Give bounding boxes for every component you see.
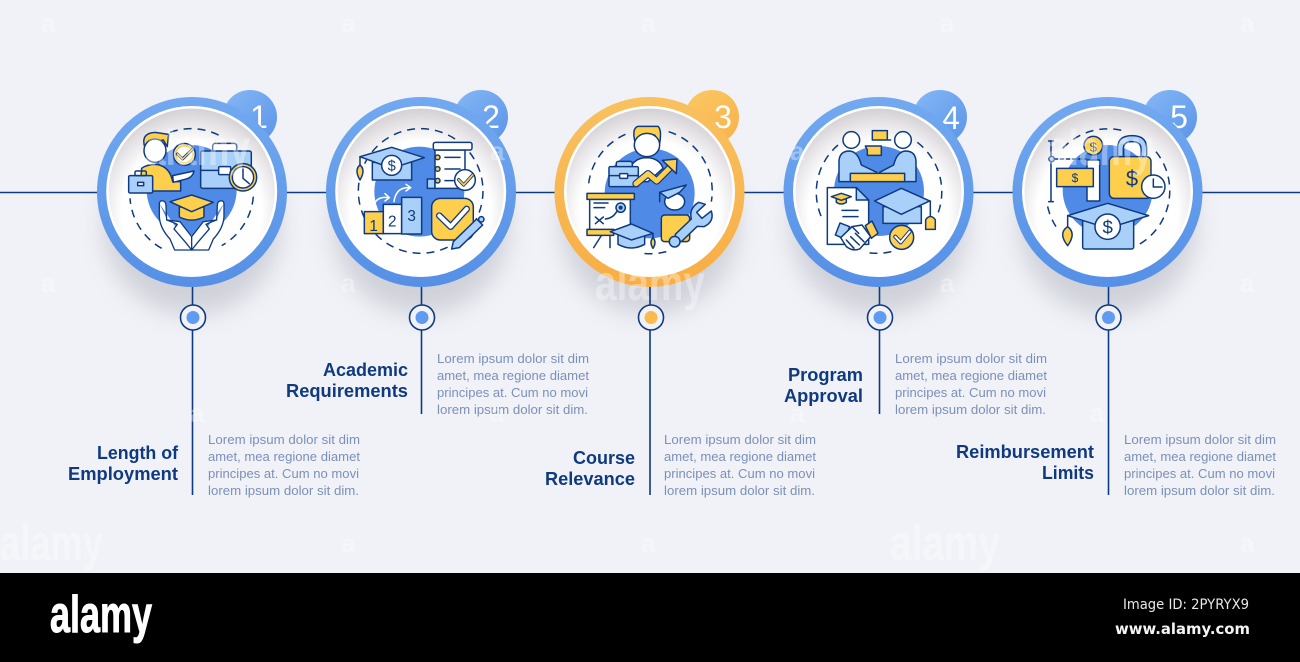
- icon: limit gauge, money, padlock, clock, graduation cap: $: [1102, 217, 1113, 238]
- watermarks: a: [341, 268, 356, 298]
- horizontal timeline: [0, 192, 1300, 194]
- text block 4: Lorem ipsum dolor sit dim: [895, 351, 1047, 366]
- text block 3: [664, 432, 816, 498]
- watermarks: a: [1240, 8, 1255, 38]
- footer band: [0, 573, 1300, 662]
- timeline marker 1: [180, 305, 206, 330]
- number badge 4: [913, 90, 967, 144]
- heading 1: [68, 443, 179, 484]
- text block 2: amet, mea regione diamet: [437, 368, 589, 383]
- watermarks: a: [341, 8, 356, 38]
- heading 3: Course: [573, 448, 635, 468]
- text block 1: amet, mea regione diamet: [208, 449, 360, 464]
- watermarks: a: [190, 398, 205, 428]
- timeline marker 2: [410, 305, 434, 330]
- watermarks: a: [1240, 528, 1255, 558]
- heading 3: [545, 448, 635, 489]
- footer image id: Image ID: 2PYRYX9: [1123, 597, 1249, 613]
- number badge 3: [685, 90, 739, 144]
- number badge 4: 4: [942, 100, 960, 136]
- text block 1: Lorem ipsum dolor sit dim: [208, 432, 360, 447]
- ring 2: [326, 97, 516, 287]
- heading 2: [286, 360, 408, 401]
- heading 1: Length of: [97, 443, 179, 463]
- timeline marker 4: [868, 305, 892, 330]
- heading 4: Program: [788, 365, 863, 385]
- heading 3: Relevance: [545, 469, 635, 489]
- ring 1: [97, 97, 287, 287]
- watermarks: a: [490, 136, 505, 166]
- watermarks: a: [790, 136, 805, 166]
- watermarks: a: [641, 528, 656, 558]
- icon: limit gauge, money, padlock, clock, graduation cap: $: [1072, 171, 1079, 185]
- text block 1: principes at. Cum no movi: [208, 466, 359, 481]
- watermarks: a: [641, 8, 656, 38]
- icon: limit gauge, money, padlock, clock, graduation cap: $: [1126, 166, 1138, 191]
- text block 5: lorem ipsum dolor sit dim.: [1124, 483, 1275, 498]
- watermarks: alamy: [595, 255, 705, 311]
- heading 5: Limits: [1042, 463, 1094, 483]
- text block 5: Lorem ipsum dolor sit dim: [1124, 432, 1276, 447]
- number badge 1: 1: [250, 99, 268, 135]
- icon: graduation cap, podium, checklist, checkbox and pen: 1: [369, 218, 378, 235]
- footer logo: alamy: [50, 586, 152, 644]
- watermarks: a: [940, 8, 955, 38]
- text block 3: amet, mea regione diamet: [664, 449, 816, 464]
- ring 4: [784, 97, 974, 287]
- heading 5: [956, 442, 1094, 483]
- icon: graduation cap, podium, checklist, checkbox and pen: 3: [407, 208, 416, 225]
- text block 4: amet, mea regione diamet: [895, 368, 1047, 383]
- text block 4: [895, 351, 1047, 417]
- text block 5: amet, mea regione diamet: [1124, 449, 1276, 464]
- ring 3: [554, 97, 744, 287]
- watermarks: a: [1090, 398, 1105, 428]
- panel 3: Course Relevance: [545, 90, 816, 498]
- timeline marker 5: [1096, 305, 1121, 330]
- icon: presenter, growth arrow, whiteboard, student with wrench: [587, 126, 712, 254]
- text block 4: principes at. Cum no movi: [895, 385, 1046, 400]
- watermarks: a: [341, 528, 356, 558]
- panel 1: Length of Employment: [68, 90, 360, 498]
- heading 4: [784, 365, 863, 406]
- heading 5: Reimbursement: [956, 442, 1094, 462]
- text block 3: principes at. Cum no movi: [664, 466, 815, 481]
- number badge 2: 2: [482, 99, 500, 135]
- icon: graduation cap, podium, checklist, checkbox and pen: 2: [388, 213, 397, 230]
- watermarks: a: [790, 398, 805, 428]
- icon: employee, briefcase, clock, graduation cap in hands: [129, 129, 257, 250]
- number badge 5: 5: [1170, 99, 1188, 135]
- text block 3: Lorem ipsum dolor sit dim: [664, 432, 816, 447]
- footer url: www.alamy.com: [1115, 620, 1250, 638]
- watermarks: alamy: [1048, 120, 1153, 176]
- timeline marker 3: [638, 305, 664, 330]
- icon: limit gauge, money, padlock, clock, graduation cap: $: [1090, 139, 1098, 154]
- panel 2: Academic Requirements: [286, 90, 589, 417]
- watermarks: a: [490, 398, 505, 428]
- heading 1: Employment: [68, 464, 178, 484]
- panel 5: Reimbursement Limits: [956, 90, 1276, 498]
- icon: graduation cap, podium, checklist, checkbox and pen: $: [388, 159, 396, 175]
- text block 3: lorem ipsum dolor sit dim.: [664, 483, 815, 498]
- icon: meeting, document, handshake, graduation cap: [816, 131, 942, 253]
- watermarks: alamy: [890, 515, 1000, 571]
- text block 2: [437, 351, 589, 417]
- watermarks: alamy: [0, 515, 103, 571]
- panel 4: Program Approval: [784, 90, 1047, 417]
- text block 2: principes at. Cum no movi: [437, 385, 588, 400]
- text block 1: lorem ipsum dolor sit dim.: [208, 483, 359, 498]
- icon: graduation cap, podium, checklist, checkbox and pen: [357, 129, 484, 253]
- text block 5: [1124, 432, 1276, 498]
- watermarks: alamy: [145, 120, 250, 176]
- watermarks: a: [940, 268, 955, 298]
- watermarks: a: [1240, 268, 1255, 298]
- text block 1: [208, 432, 360, 498]
- heading 4: Approval: [784, 386, 863, 406]
- icon: limit gauge, money, padlock, clock, graduation cap: [1047, 129, 1170, 249]
- ring 5: [1012, 97, 1202, 287]
- heading 2: Academic: [323, 360, 408, 380]
- number badge 3: 3: [714, 99, 732, 135]
- text block 5: principes at. Cum no movi: [1124, 466, 1275, 481]
- watermarks: a: [41, 8, 56, 38]
- text block 4: lorem ipsum dolor sit dim.: [895, 402, 1046, 417]
- watermarks: a: [41, 268, 56, 298]
- text block 2: Lorem ipsum dolor sit dim: [437, 351, 589, 366]
- number badge 1: [223, 90, 277, 144]
- number badge 2: [454, 90, 508, 144]
- heading 2: Requirements: [286, 381, 408, 401]
- number badge 5: [1143, 90, 1197, 144]
- text block 2: lorem ipsum dolor sit dim.: [437, 402, 588, 417]
